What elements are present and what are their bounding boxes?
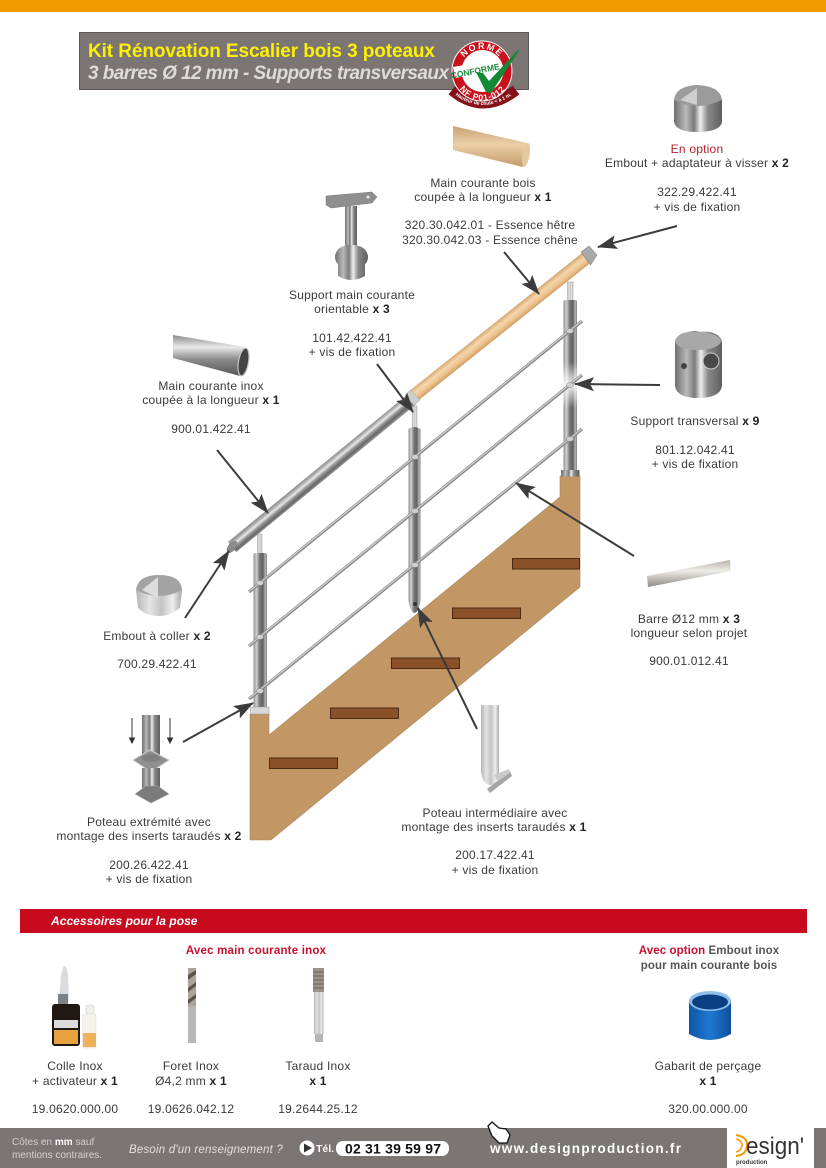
- text: colle inox: + activateur x 1: [32, 1074, 118, 1088]
- text: main courante bois: coupée à la longueur x 1: [414, 190, 552, 204]
- text: main courante bois: [402, 176, 578, 247]
- text: support main courante: + vis de fixation: [309, 345, 395, 359]
- text: taraud: x 1: [309, 1074, 327, 1088]
- arrows: [183, 226, 677, 742]
- text: support main courante: orientable x 3: [314, 302, 390, 316]
- text: embout option: Embout + adaptateur à visser x 2: [605, 156, 789, 170]
- text: gabarit: x 1: [699, 1074, 717, 1088]
- wooden stringer: [250, 476, 580, 840]
- text: embout à coller: Embout à coller x 2: [103, 629, 211, 643]
- text: main courante bois: 320.30.042.01 - Essence hêtre: [405, 218, 575, 232]
- text: embout à coller: 700.29.422.41: [117, 657, 197, 671]
- small arrows: [130, 718, 172, 743]
- footer note: Côtes en mm sauf: [12, 1137, 95, 1148]
- product: taraud: [313, 968, 324, 1042]
- text: colle inox: [32, 1059, 118, 1116]
- transversal bars: [249, 320, 582, 699]
- text: poteau extrémité: 200.26.422.41: [109, 858, 189, 872]
- badge: norme conforme NF P01-012: NF P01-012: [460, 86, 505, 100]
- text: embout option: 322.29.422.41: [657, 185, 737, 199]
- bar supports: [256, 328, 574, 694]
- text: poteau extrémité: montage des inserts taraudés x 2: [56, 829, 242, 843]
- text: foret: Foret Inox: [163, 1059, 219, 1073]
- text: main courante bois: 320.30.042.03 - Essence chêne: [402, 233, 578, 247]
- text: barre: 900.01.012.41: [649, 654, 729, 668]
- product: embout à coller: [136, 575, 182, 616]
- text: main courante inox: Main courante inox: [158, 379, 264, 393]
- product: colle + activateur: [52, 966, 96, 1048]
- text: foret: Ø4,2 mm x 1: [155, 1074, 227, 1088]
- hand cursor: [488, 1122, 510, 1143]
- wooden handrail: [408, 253, 590, 402]
- footer note: [12, 1137, 102, 1161]
- text: barre: longueur selon projet: [631, 626, 748, 640]
- text: support transversal: Support transversal x 9: [630, 414, 760, 428]
- badge: norme conforme NF P01-012: CONFORME: [450, 61, 501, 81]
- product: barre: [647, 560, 731, 587]
- text: gabarit: 320.00.000.00: [668, 1102, 748, 1116]
- product: embout + adaptateur: [674, 85, 722, 132]
- footer: [0, 1122, 826, 1168]
- text: main courante inox: coupée à la longueur x 1: [142, 393, 280, 407]
- text: colle inox: Colle Inox: [47, 1059, 103, 1073]
- stainless handrail: [228, 394, 416, 552]
- footer question: Besoin d'un renseignement ?: [129, 1144, 283, 1156]
- phone: Tél.: [316, 1143, 334, 1155]
- text: poteau extrémité: [56, 815, 242, 886]
- text: foret: 19.0626.042.12: [148, 1102, 234, 1116]
- text: taraud: 19.2644.25.12: [278, 1102, 358, 1116]
- phone: 02 31 39 59 97: [345, 1140, 441, 1156]
- text: support transversal: + vis de fixation: [652, 457, 738, 471]
- text: gabarit: [655, 1059, 761, 1116]
- logo: Design' production: esign': [746, 1133, 804, 1160]
- product: stainless tube: [173, 335, 251, 377]
- text: embout option: En option: [671, 142, 723, 156]
- title line 2: 3 barres Ø 12 mm - Supports transversaux: [88, 63, 450, 84]
- text: barre: Barre Ø12 mm x 3: [638, 612, 740, 626]
- top orange bar: [0, 0, 826, 12]
- text: poteau intermédiaire: 200.17.422.41: [455, 848, 535, 862]
- product: support transversal: [675, 331, 722, 398]
- text: taraud: [278, 1059, 358, 1116]
- text: support main courante: Support main courante: [289, 288, 415, 302]
- text: embout à coller: [103, 629, 211, 671]
- product: poteau intermédiaire: [481, 705, 512, 793]
- accessories band: [20, 909, 807, 933]
- text: poteau intermédiaire: Poteau intermédiaire avec: [423, 806, 567, 820]
- product: gabarit de perçage: [689, 991, 731, 1040]
- handrail joint ring: [405, 390, 420, 406]
- heading: avec option embout inox: pour main courante bois: [641, 960, 777, 972]
- phone: [300, 1140, 449, 1156]
- product: wood handrail: [453, 126, 532, 167]
- product: foret: [188, 968, 196, 1043]
- text: poteau intermédiaire: [401, 806, 587, 877]
- title line 1: Kit Rénovation Escalier bois 3 poteaux: [88, 41, 435, 62]
- text: taraud: Taraud Inox: [285, 1059, 351, 1073]
- badge: norme conforme NF P01-012: NORME: [460, 42, 503, 57]
- text: embout option: [605, 142, 789, 214]
- stair illustration: [225, 246, 597, 840]
- logo: Design' production: [736, 1133, 804, 1166]
- treads: [270, 558, 580, 768]
- handrail end cap: [581, 246, 597, 265]
- text: poteau intermédiaire: + vis de fixation: [452, 863, 538, 877]
- text: barre: [631, 612, 748, 668]
- heading: avec main courante inox: Avec main courante inox: [186, 945, 327, 957]
- product: poteau extrémité: [130, 715, 172, 803]
- heading: avec option embout inox: Avec option Embout inox: [639, 945, 780, 957]
- text: foret: [148, 1059, 234, 1116]
- badge: norme conforme NF P01-012: Hauteur de chute < à 1 m.: [456, 92, 512, 105]
- text: main courante inox: [142, 379, 280, 436]
- logo: Design' production: production: [736, 1160, 768, 1166]
- text: support transversal: 801.12.042.41: [655, 443, 735, 457]
- text: embout option: + vis de fixation: [654, 200, 740, 214]
- text: poteau intermédiaire: montage des inserts taraudés x 1: [401, 820, 587, 834]
- text: support main courante: [289, 288, 415, 359]
- heading: avec option embout inox: [639, 945, 780, 972]
- text: main courante bois: Main courante bois: [430, 176, 536, 190]
- text: colle inox: 19.0620.000.00: [32, 1102, 118, 1116]
- website: www.designproduction.fr: [489, 1141, 682, 1156]
- text: main courante inox: 900.01.422.41: [171, 422, 251, 436]
- stainless handrail end: [225, 540, 239, 554]
- product: support main courante: [326, 192, 377, 280]
- text: support main courante: 101.42.422.41: [312, 331, 392, 345]
- accessories band: Accessoires pour la pose: [50, 914, 198, 928]
- text: support transversal: [630, 414, 760, 471]
- text: poteau extrémité: + vis de fixation: [106, 872, 192, 886]
- text: gabarit: Gabarit de perçage: [655, 1059, 761, 1073]
- title panel: [80, 32, 528, 90]
- footer note: mentions contraires.: [12, 1150, 102, 1161]
- badge: norme conforme NF P01-012: [448, 40, 520, 108]
- text: poteau extrémité: Poteau extrémité avec: [87, 815, 211, 829]
- posts: [250, 282, 580, 714]
